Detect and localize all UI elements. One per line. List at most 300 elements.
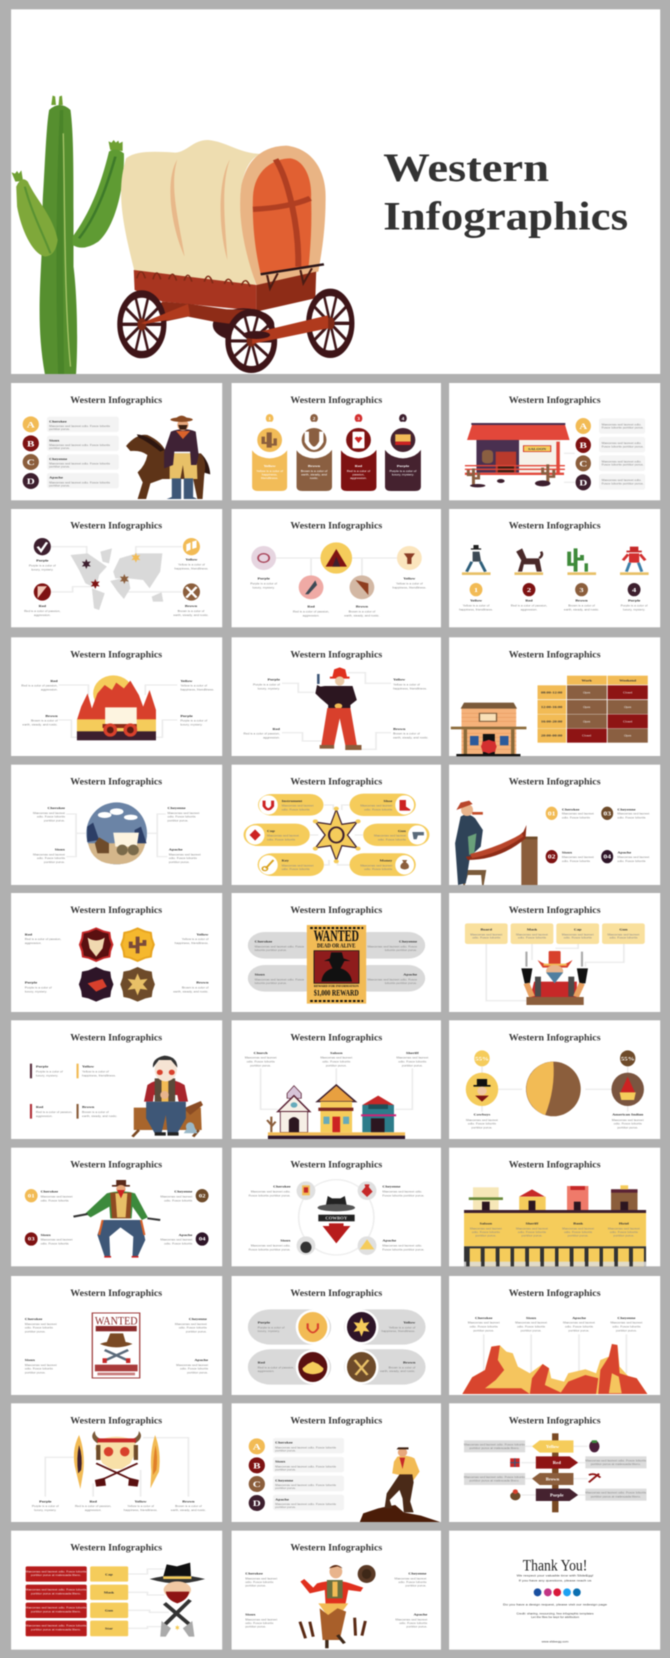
option B: Maecenas sed laoreet odio. — [602, 441, 642, 445]
item: Brown: earth, steady, and rustic. — [173, 613, 209, 617]
illustration: signpost — [521, 1433, 588, 1512]
text: Red: Red is a color of passion, — [75, 1504, 112, 1508]
heading: Western Infographics — [509, 1160, 601, 1170]
text: Sheriff: Maecenas sed laoreet — [516, 1227, 548, 1230]
text: Cheyenne: porttitor purus. — [168, 819, 189, 823]
item: American Indian — [611, 1050, 644, 1129]
note: third left: porttitor purus at malesuada libero. — [469, 1479, 520, 1483]
poster: wanted dead or alive: REWARD FOR INFORMATION — [314, 984, 359, 988]
text: Sioux: Maecenas sed laoreet — [25, 1363, 57, 1367]
text: Brown: Brown is a color of — [31, 719, 58, 723]
illustration: covered wagon — [120, 140, 352, 369]
panel: slide 12, man at the bar — [449, 765, 660, 885]
text: Cherokee: Cherokee — [47, 806, 65, 810]
text: Cheyenne: Cheyenne — [189, 1317, 207, 1321]
panel: slide 28, masked outlaw — [11, 1531, 222, 1650]
heading: Western Infographics — [290, 395, 383, 406]
panel: slide 21, main street — [449, 1148, 660, 1266]
item: Cheyenne — [358, 1181, 425, 1200]
pill: Yellow: happiness, friendliness. — [381, 1329, 416, 1333]
option C: Cheyenne — [49, 457, 67, 461]
text: Sheriff: porttitor purus. — [402, 1064, 423, 1067]
item: Apache: Apache — [382, 1239, 397, 1243]
item: Purple: Purple is a color of — [29, 564, 56, 568]
item: Brown: Brown is a color of — [178, 609, 205, 613]
text: Yellow: happiness, friendliness. — [175, 941, 209, 945]
pill: Purple: luxury, mystery. — [258, 1329, 280, 1333]
row: Star: Star — [105, 1627, 113, 1631]
text: Yellow: Yellow — [135, 1500, 147, 1503]
text: Cherokee: odio. Fusce lobortis — [37, 815, 66, 819]
text: Apache — [176, 1358, 209, 1374]
text: Red: Red is a color of passion, — [36, 1110, 72, 1114]
text: Red: Red — [36, 1105, 44, 1109]
item: Cheyenne: odio. Fusce lobortis — [164, 1199, 193, 1202]
text: Cherokee: Cherokee — [25, 1317, 43, 1321]
row: Star — [26, 1621, 128, 1636]
option D: Maecenas sed laoreet odio. — [602, 478, 642, 482]
item: Cheyenne — [160, 1189, 209, 1202]
text: Brown — [393, 727, 429, 740]
text: Sioux: odio. Fusce lobortis — [37, 856, 66, 860]
text: Brown: Brown is a color of — [182, 986, 209, 989]
text: Saloon: porttitor purus. — [326, 1064, 347, 1067]
text: Purple: Purple — [180, 714, 193, 718]
text: message: We respect your valuable time with SlideEgg! — [517, 1574, 594, 1578]
column: Purple: Purple is a color of — [390, 469, 417, 473]
item: Cherokee: Maecenas sed laoreet — [562, 812, 594, 816]
text: Bank: porttitor purus. — [568, 1234, 589, 1238]
option C: Maecenas sed laoreet odio. — [602, 460, 642, 463]
panel: slide 4, world map — [11, 509, 222, 627]
pill: Brown: Brown is a color of — [389, 1366, 416, 1369]
table: hours: Closed — [623, 720, 633, 723]
item: Cheyenne: Cheyenne — [382, 1185, 401, 1189]
note: third left: Maecenas sed laoreet odio. Fusce lobortis — [464, 1475, 525, 1479]
column: Brown — [293, 414, 335, 491]
panel: slide 30, thank you — [449, 1531, 660, 1650]
table: hours — [538, 676, 648, 743]
row: Cap: Cap — [105, 1573, 113, 1576]
pill: Key — [258, 853, 324, 876]
item: horse, Red: aggression. — [521, 608, 538, 611]
text: Sheriff: Maecenas sed laoreet — [396, 1056, 428, 1060]
option D: Apache — [49, 476, 63, 480]
text: Hotel — [608, 1222, 640, 1238]
text: Brown: Brown is a color of — [175, 1504, 202, 1508]
option D: Maecenas sed laoreet odio. Fusce lobortis — [275, 1502, 337, 1506]
text: Yellow: Yellow — [196, 933, 209, 936]
text: Apache: odio. Fusce lobortis — [399, 1621, 428, 1625]
option C — [23, 454, 119, 470]
text: Apache: porttitor purus. — [406, 1625, 428, 1629]
text: Apache: Apache — [572, 1316, 586, 1320]
option C: C — [253, 1480, 261, 1490]
text: Cherokee: porttitor purus. — [473, 1329, 494, 1332]
box: Gun: Gun — [619, 928, 628, 931]
panel: slide 25, skull and feathers — [11, 1403, 222, 1522]
item: Red: Red is a color of passion, — [24, 609, 61, 613]
title: Western Infographics — [383, 145, 628, 238]
item: American Indian: Maecenas sed laoreet — [612, 1118, 644, 1122]
text: Saloon — [470, 1222, 502, 1238]
poster: wanted dead or alive: DEAD OR ALIVE — [317, 943, 356, 949]
text: Bank — [562, 1222, 594, 1238]
text: website: www.slideegg.com — [542, 1640, 569, 1643]
text: Cheyenne — [168, 806, 200, 823]
text: Apache — [563, 1316, 595, 1332]
option B: Fusce lobortis porttitor purus. — [602, 445, 644, 448]
text: Yellow: Yellow is a color of — [180, 684, 207, 688]
text: Saloon: Saloon — [480, 1222, 493, 1225]
text: Red: Red is a color of passion, — [25, 937, 61, 941]
pill: Purple: Purple — [258, 1321, 270, 1324]
text: Cheyenne: Maecenas sed laoreet — [168, 811, 200, 815]
column: Purple: Purple — [397, 464, 409, 468]
panel: slide 15, bandit with boxes — [449, 893, 660, 1012]
text: Bank: odio. Fusce lobortis — [564, 1230, 593, 1234]
text: Sioux: Sioux — [25, 1358, 35, 1362]
pill: Key: Maecenas sed laoreet — [282, 864, 314, 867]
rows 7 and 8 — [11, 1148, 660, 1395]
column: Yellow: friendliness. — [261, 476, 278, 480]
item: rider, Purple: Purple — [628, 599, 641, 603]
table: hours: 08:00-12:00 — [541, 691, 562, 695]
item: Apache: Fusce lobortis porttitor purus. — [382, 1248, 425, 1251]
pill: Red: Red is a color of passion, — [258, 1366, 294, 1369]
item: Apache: Apache — [617, 851, 632, 855]
text: Cherokee — [468, 1316, 500, 1332]
text: Brown: Brown — [196, 981, 209, 985]
text: Cheyenne: Cheyenne — [617, 1316, 636, 1320]
text: Hotel: Hotel — [619, 1222, 629, 1225]
note: top left: porttitor purus at malesuada libero. — [469, 1446, 520, 1450]
text: Brown: earth, steady, and rustic. — [173, 990, 209, 993]
illustration: canyon and wagon — [59, 675, 177, 740]
option C: Maecenas sed laoreet odio. Fusce lobortis — [275, 1483, 337, 1487]
text: Sioux: Sioux — [55, 848, 65, 851]
text: credit — [517, 1612, 594, 1619]
heading: Western Infographics — [70, 905, 163, 916]
box: Mask — [511, 923, 553, 944]
illustration: saloon — [465, 423, 575, 487]
illustration: wooden saloon — [451, 703, 526, 756]
option B: Sioux — [275, 1460, 285, 1464]
option C — [576, 455, 645, 471]
text: Red: Red is a color of passion, — [21, 684, 58, 688]
panel: slide 7, canyon with wagon — [11, 637, 222, 756]
pill: Yellow: Yellow is a color of — [389, 1326, 416, 1329]
badge: skull — [79, 927, 113, 962]
text: Apache: Apache — [169, 848, 183, 851]
pill: Apache: lobortis porttitor purus. — [385, 981, 417, 985]
row: Mask: porttitor purus at malesuada libero. — [31, 1592, 81, 1595]
pill: Shoe — [350, 794, 416, 816]
pill: Money: Maecenas sed laoreet — [360, 864, 392, 867]
row: Cap — [26, 1566, 128, 1582]
text: Brown: Brown — [82, 1105, 95, 1109]
item: Red: Red — [39, 604, 47, 608]
heading: Western Infographics — [70, 1032, 163, 1043]
text: Purple: luxury, mystery. — [36, 1074, 58, 1078]
item: Sioux: Maecenas sed laoreet — [562, 855, 594, 859]
item: Cherokee: odio. Fusce lobortis — [41, 1199, 69, 1202]
text: Apache: porttitor purus. — [187, 1371, 208, 1374]
text: Saloon: odio. Fusce lobortis — [472, 1230, 500, 1234]
pill: Cherokee: Maecenas sed laoreet odio. Fusce — [255, 945, 305, 948]
heading: Western Infographics — [509, 905, 601, 916]
text: Cheyenne: porttitor purus. — [616, 1329, 637, 1332]
pill: Money: odio. Fusce lobortis — [364, 867, 393, 871]
text: credit: Let the files be kept for attribution — [531, 1615, 579, 1619]
item: Sioux: odio. Fusce lobortis — [562, 859, 591, 863]
poster: wanted dead or alive — [307, 925, 366, 1004]
heading: Western Infographics — [509, 395, 601, 406]
text: Cherokee: Maecenas sed laoreet — [25, 1322, 57, 1326]
option B: B — [580, 441, 587, 451]
text: Purple: Purple is a color of — [36, 1070, 63, 1074]
item: Cowboys: Maecenas sed laoreet — [466, 1118, 498, 1122]
text: Apache — [169, 848, 201, 864]
row: Gun: Maecenas sed laoreet odio. Fusce lobortis — [26, 1606, 87, 1610]
item: Cowboys: porttitor purus. — [472, 1126, 493, 1129]
text: Cherokee — [25, 1317, 57, 1333]
text: Brown: earth, steady, and rustic. — [393, 736, 429, 740]
pill: Brown — [344, 1349, 426, 1385]
text: message — [517, 1574, 594, 1583]
text: Sioux: odio. Fusce lobortis — [25, 1367, 53, 1371]
item: Brown — [173, 583, 209, 617]
row: Gun: Gun — [105, 1609, 114, 1613]
column: Brown: earth, steady, and — [301, 473, 327, 476]
item: Cheyenne: 02 — [199, 1194, 206, 1199]
illustration: old man — [132, 1056, 203, 1137]
text: Apache: Apache — [414, 1613, 428, 1616]
heading: Western Infographics — [290, 1543, 383, 1553]
item: Cheyenne: Cheyenne — [617, 808, 636, 811]
illustration: saloon: SALOON — [528, 447, 546, 451]
text: Red — [75, 1500, 112, 1512]
pill: Instrument: Instrument — [282, 799, 303, 803]
text: Cherokee: Maecenas sed laoreet — [468, 1321, 500, 1325]
note: second right: Maecenas sed laoreet odio. Fusce lobortis — [585, 1459, 647, 1462]
poster: wanted — [92, 1313, 140, 1378]
option A — [576, 418, 645, 434]
option A: porttitor purus. — [275, 1449, 296, 1452]
option A: Maecenas sed laoreet odio. Fusce lobortis — [275, 1446, 337, 1449]
heading: Western Infographics — [509, 1416, 601, 1426]
text: Brown: earth, steady, and rustic. — [171, 1508, 206, 1512]
item: Apache: odio. Fusce lobortis — [617, 859, 646, 863]
text: Sioux: Maecenas sed laoreet — [515, 1321, 547, 1325]
text: Red: Red is a color of passion, — [243, 732, 280, 736]
option A: Maecenas sed laoreet odio. — [602, 423, 642, 426]
option C: Cheyenne — [275, 1479, 294, 1482]
table: hours: Open — [583, 691, 591, 694]
item: Cheyenne: odio. Fusce lobortis — [617, 816, 646, 820]
text: Yellow: Yellow — [393, 678, 405, 682]
heading: Western Infographics — [70, 1543, 163, 1553]
item: Cherokee: Cherokee — [273, 1185, 291, 1189]
item: Sioux: Fusce lobortis porttitor purus. — [249, 1248, 291, 1251]
row: Cap: porttitor purus at malesuada libero. — [31, 1573, 81, 1577]
item: Apache — [358, 1236, 425, 1255]
text: Hotel: Maecenas sed laoreet — [608, 1227, 640, 1230]
item: Purple: Purple — [257, 577, 270, 580]
panel: slide 5, connected circles — [232, 509, 441, 627]
text: Sioux — [245, 1613, 277, 1629]
item: Sioux: Sioux — [41, 1233, 51, 1237]
column: Yellow: Yellow is a color of — [256, 469, 283, 473]
title: Western Infographics: Western — [383, 145, 549, 190]
pill: Shoe: Shoe — [383, 799, 393, 803]
item: Yellow — [174, 538, 209, 570]
heading: Western Infographics — [290, 777, 383, 787]
text: Yellow: Yellow is a color of — [127, 1504, 154, 1508]
heading: Western Infographics — [70, 1416, 163, 1426]
item: Cheyenne: Cheyenne — [174, 1190, 193, 1194]
item: Cherokee: Cherokee — [41, 1190, 58, 1194]
text: Apache: odio. Fusce lobortis — [169, 856, 197, 860]
text: Cheyenne: Cheyenne — [408, 1572, 427, 1575]
heading: Western Infographics — [290, 905, 383, 916]
text: Brown: earth, steady, and rustic. — [82, 1114, 118, 1118]
item: Apache: Apache — [179, 1233, 193, 1237]
item: cactus, Brown: Brown — [575, 599, 589, 603]
option B: Maecenas sed laoreet odio. Fusce lobortis — [49, 443, 111, 447]
text: Sioux: Sioux — [526, 1316, 536, 1320]
pill: Red — [248, 1349, 331, 1385]
rows 5 and 6 — [11, 893, 660, 1139]
option B: Maecenas sed laoreet odio. Fusce lobortis — [275, 1465, 337, 1468]
item: Cherokee: Maecenas sed laoreet — [41, 1195, 73, 1198]
item: Sioux — [546, 850, 594, 863]
item: Cheyenne: Maecenas sed laoreet — [617, 812, 650, 816]
note: second right — [585, 1456, 647, 1468]
item: Sioux: Maecenas sed laoreet — [41, 1238, 73, 1242]
text: Cherokee: odio. Fusce lobortis — [470, 1325, 498, 1328]
text: Sheriff: odio. Fusce lobortis — [518, 1230, 547, 1234]
heading: Western Infographics — [70, 1160, 163, 1170]
text: Purple: luxury, mystery. — [25, 990, 47, 993]
column: Red: aggression. — [350, 476, 367, 480]
item: Sioux: Sioux — [562, 851, 572, 855]
item: Sioux: 03 — [28, 1237, 35, 1242]
column: Yellow: happiness, — [262, 473, 278, 476]
heading: Western Infographics — [70, 395, 163, 406]
box: Board: Maecenas sed laoreet — [470, 933, 502, 936]
panel: slide 18, pie comparison — [449, 1020, 660, 1139]
text: credit: Credit: sharing, resourcing, free infographic templates — [517, 1612, 594, 1615]
note: top left — [464, 1440, 525, 1452]
option A — [23, 416, 119, 432]
row: Cap: Maecenas sed laoreet odio. Fusce lobortis — [26, 1570, 87, 1573]
text: Apache: odio. Fusce lobortis — [565, 1325, 594, 1328]
text: Brown — [22, 714, 59, 727]
option A: A — [27, 420, 36, 430]
heading: Western Infographics — [290, 650, 383, 660]
item: horse, Red: Red — [525, 599, 534, 603]
box: Mask: Mask — [527, 928, 538, 931]
heading: Western Infographics — [290, 1160, 383, 1170]
item: Cherokee: Fusce lobortis porttitor purus. — [249, 1194, 291, 1197]
text: Brown: Brown — [45, 714, 59, 718]
text: Yellow: Yellow is a color of — [393, 683, 420, 686]
option D — [23, 473, 119, 489]
pill: Purple — [248, 1309, 331, 1345]
text: Purple: Purple — [25, 981, 37, 985]
text: Cherokee: odio. Fusce lobortis — [245, 1580, 274, 1584]
text: Purple — [30, 1064, 63, 1078]
pill: Cheyenne: lobortis porttitor purus. — [385, 948, 417, 952]
box: Cap — [556, 923, 599, 944]
pill: Shoe: Maecenas sed laoreet — [360, 804, 392, 808]
option D: D — [27, 477, 35, 487]
text: Sioux: Maecenas sed laoreet — [245, 1618, 277, 1621]
column: Brown: Brown — [308, 464, 321, 468]
panel: slide 2, four arch columns — [232, 383, 441, 500]
text: Red — [25, 933, 61, 945]
column: Brown: Brown is a color of — [301, 469, 328, 473]
illustration: outlaw head and crossed guns — [150, 1563, 205, 1637]
pill: Brown: earth, steady, and rustic. — [380, 1369, 416, 1373]
text: Cherokee: Maecenas sed laoreet — [33, 811, 65, 815]
item: Yellow: Yellow is a color of — [178, 563, 205, 566]
item: Apache: Maecenas sed laoreet odio. — [382, 1244, 422, 1247]
column: Red: 3 — [357, 417, 360, 422]
item: Apache: 04 — [199, 1237, 206, 1242]
text: Bank: Bank — [573, 1222, 584, 1225]
icon: right feather — [150, 1435, 160, 1488]
item: Cowboys — [466, 1050, 498, 1129]
option B — [249, 1457, 344, 1473]
text: Yellow: happiness, friendliness. — [180, 688, 214, 692]
item: Red — [24, 583, 61, 617]
text: message: If you have any questions, please reach us — [519, 1579, 592, 1583]
text: Cherokee: porttitor purus. — [245, 1584, 266, 1588]
option D: porttitor purus. — [275, 1505, 296, 1509]
illustration: church — [267, 1086, 310, 1132]
text: Sheriff: Sheriff — [406, 1051, 419, 1055]
pill: Money — [350, 853, 416, 876]
text: Cherokee: porttitor purus. — [44, 819, 65, 823]
item: Red — [293, 575, 329, 617]
option D: D — [253, 1499, 261, 1509]
text: Purple: Purple is a color of — [253, 683, 280, 686]
option A: Maecenas sed laoreet odio. Fusce lobortis — [49, 424, 111, 428]
panel: slide 9, opening hours table — [449, 637, 660, 756]
item: Cheyenne — [601, 807, 650, 820]
text: Brown: Brown is a color of — [393, 732, 420, 736]
panel: slide 13, four badges — [11, 893, 222, 1012]
table: hours: 12:00-16:00 — [541, 705, 562, 709]
option C: porttitor purus. — [49, 465, 70, 469]
item: Yellow — [392, 546, 427, 589]
illustration: signpost: Brown — [546, 1477, 560, 1481]
illustration: green building — [361, 1096, 396, 1132]
text: Cheyenne: Maecenas sed laoreet — [610, 1321, 643, 1325]
text: Purple: luxury, mystery. — [258, 687, 280, 690]
item: Apache: odio. Fusce lobortis — [164, 1242, 193, 1246]
box: Cap: odio. Fusce lobortis — [564, 936, 592, 940]
item: cactus, Brown: 3 — [579, 586, 584, 594]
illustration: bull skull and arrows — [92, 1431, 141, 1487]
item: Apache: 04 — [603, 854, 612, 860]
table: hours: Open — [583, 705, 591, 709]
item: Sioux: 02 — [548, 854, 556, 860]
pill: Sioux: Maecenas sed laoreet odio. Fusce — [255, 978, 305, 981]
item: cactus, Brown — [564, 548, 599, 611]
